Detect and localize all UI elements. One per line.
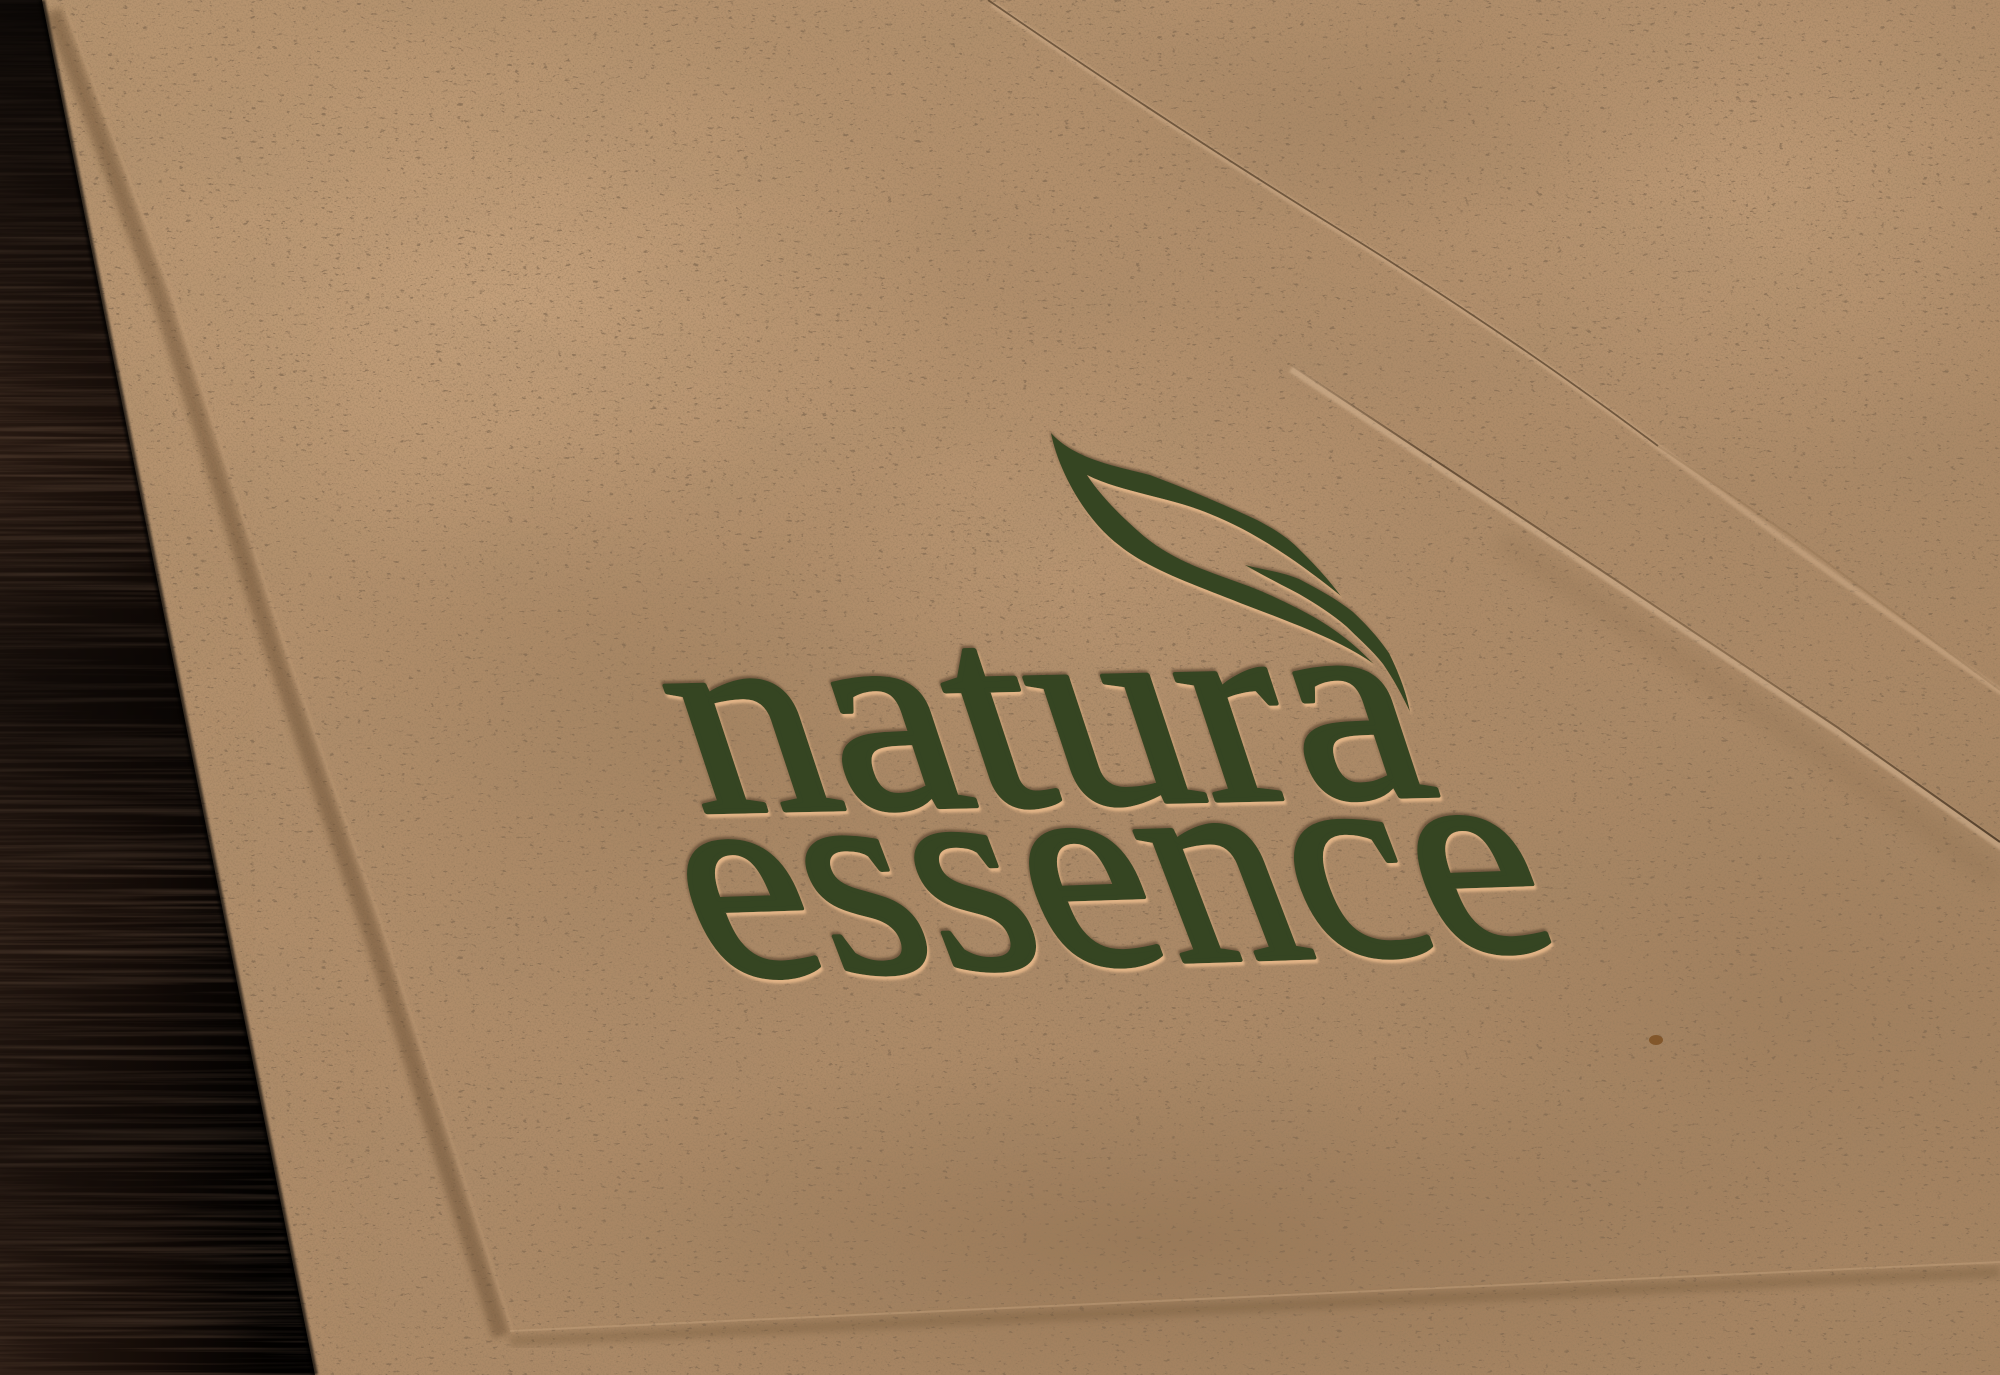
- logo: natura essence: [616, 433, 1590, 1038]
- icon: leaf: [1051, 433, 1410, 712]
- bottom edge of top sheet: [510, 1262, 2000, 1341]
- left crease of top sheet: [53, 7, 513, 1336]
- lower fold line: [1288, 363, 2000, 880]
- paper edge shadow against table: [42, 0, 315, 1375]
- brown fleck: [1649, 1035, 1663, 1045]
- upper fold line: [988, 0, 2000, 694]
- wordmark: essence: essence: [616, 697, 1590, 1038]
- dark wood table: [0, 0, 330, 1375]
- wordmark: natura: natura: [619, 552, 1462, 872]
